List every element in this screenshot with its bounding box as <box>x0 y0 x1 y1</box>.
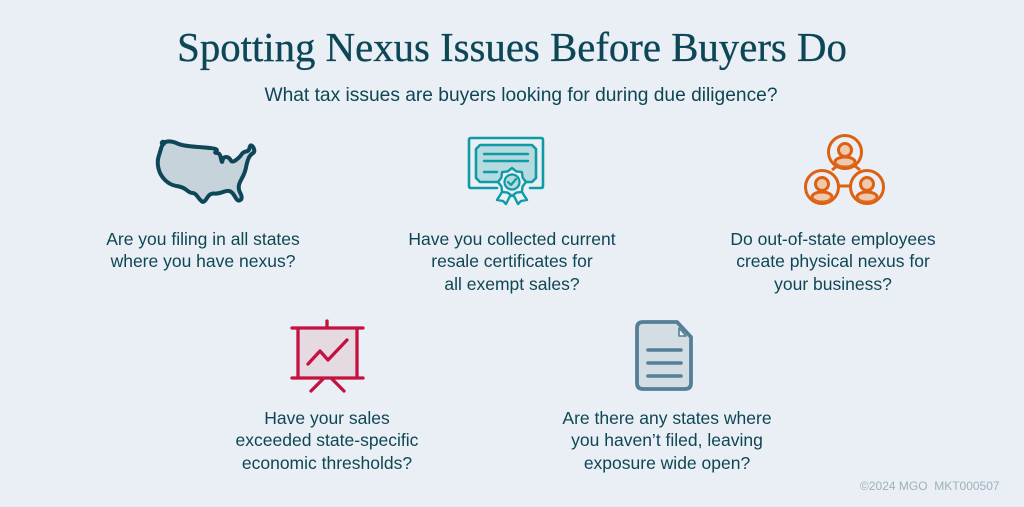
subtitle: What tax issues are buyers looking for during due diligence? <box>264 85 778 106</box>
text: filing question <box>106 229 300 271</box>
text: certificates question: Have you collected current <box>408 229 616 249</box>
title: Spotting Nexus Issues Before Buyers Do <box>177 25 847 70</box>
text: filing question: Are you filing in all states <box>106 229 300 249</box>
text: employees question: create physical nexus for <box>736 251 930 271</box>
text: thresholds question: economic thresholds? <box>242 453 412 473</box>
copyright: ©2024 MGO MKT000507 <box>860 479 1000 493</box>
text: unfiled states question: exposure wide open? <box>584 453 750 473</box>
text: filing question: where you have nexus? <box>111 251 295 271</box>
text: thresholds question: Have your sales <box>264 408 390 428</box>
icon: connected people <box>804 134 885 205</box>
text: certificates question: resale certificates for <box>431 251 593 271</box>
text: unfiled states question: Are there any states where <box>562 408 772 428</box>
text: certificates question: all exempt sales? <box>444 274 580 294</box>
text: certificates question <box>408 229 616 294</box>
text: employees question <box>730 229 936 294</box>
text: thresholds question <box>236 408 418 473</box>
text: unfiled states question <box>562 408 772 473</box>
text: thresholds question: exceeded state-specific <box>236 430 418 450</box>
text: employees question: your business? <box>774 274 892 294</box>
text: unfiled states question: you haven’t filed, leaving <box>571 430 763 450</box>
text: employees question: Do out-of-state employees <box>730 229 936 249</box>
